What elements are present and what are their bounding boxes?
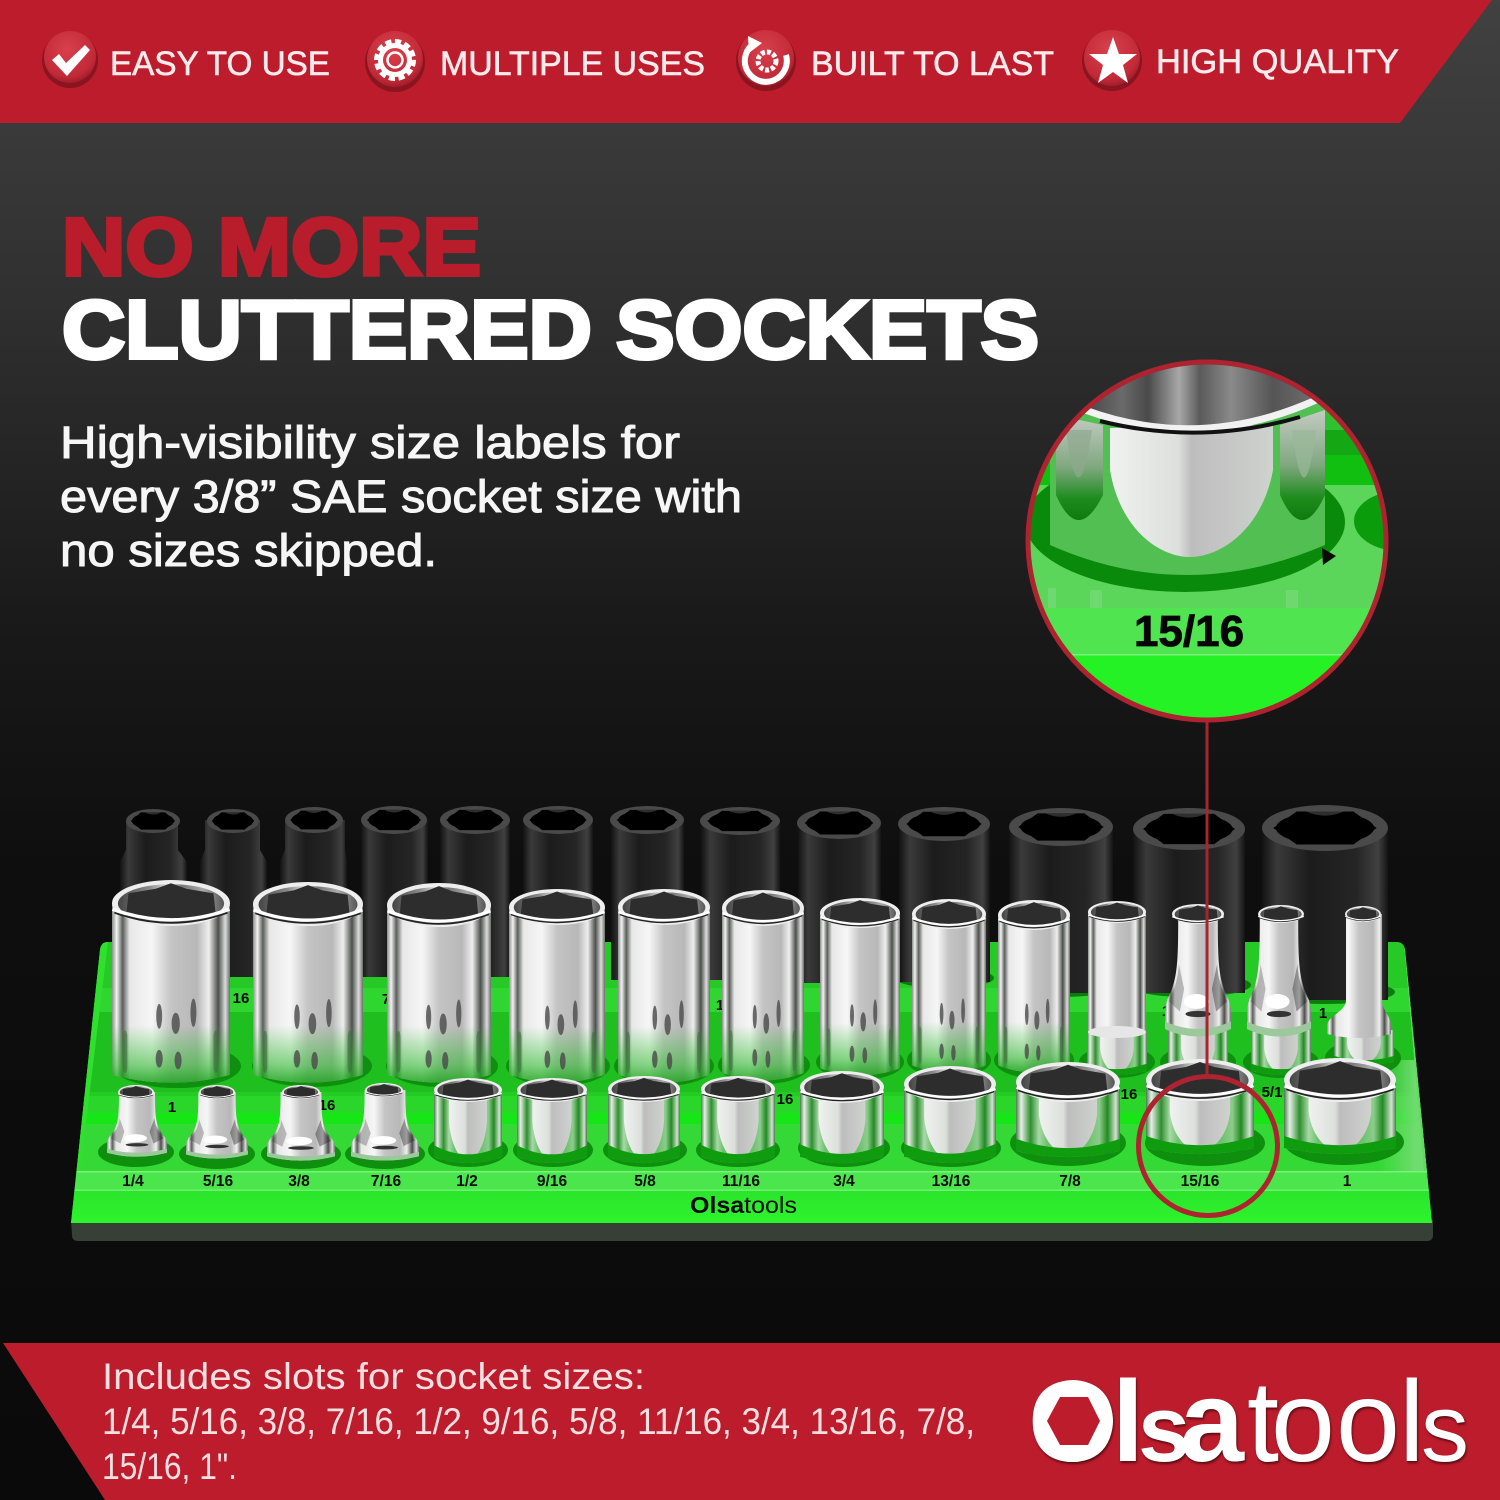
brand logo <box>1028 1358 1469 1486</box>
middle row size labels: 16 <box>1121 1086 1137 1103</box>
brand logo: s <box>1421 1375 1469 1482</box>
middle row chrome sockets <box>112 880 1401 1088</box>
front row size labels: 9/16 <box>537 1173 567 1190</box>
socket holes <box>98 1119 1404 1169</box>
tray surface in lens <box>1325 410 1344 430</box>
description text: High-visibility size labels for <box>60 417 680 468</box>
back row black sockets <box>120 805 1395 1004</box>
front row size labels: 3/8 <box>288 1173 310 1190</box>
hole shadows <box>894 968 1395 1004</box>
magnified callout <box>1026 360 1388 722</box>
back row size labels <box>233 990 1327 1022</box>
middle row size labels: 5/1 <box>1262 1084 1282 1101</box>
narrow chrome sockets <box>1087 901 1394 1075</box>
socket hole in lens <box>1030 484 1345 592</box>
back row size labels: 1 <box>1162 1003 1170 1020</box>
description text <box>60 417 742 576</box>
right chrome reflection <box>1280 410 1325 520</box>
brand logo: a <box>1180 1358 1245 1486</box>
socket interior in lens <box>1090 364 1311 426</box>
front row size labels: 7/16 <box>371 1173 401 1190</box>
top feature banner <box>0 0 1492 123</box>
description text: no sizes skipped. <box>60 525 437 576</box>
green tray <box>60 942 1450 1223</box>
front row size labels: 5/16 <box>203 1173 233 1190</box>
bottom banner <box>3 1343 1500 1500</box>
socket body in lens <box>1050 400 1325 575</box>
brand logo: O <box>1028 1358 1117 1486</box>
callout connector line <box>1206 720 1208 1078</box>
description text: every 3/8” SAE socket size with <box>60 471 742 522</box>
socket organizer product <box>60 805 1450 1241</box>
socket size list text: Includes slots for socket sizes: <box>102 1356 645 1397</box>
front row size labels: 11/16 <box>722 1173 760 1190</box>
dark base of tray <box>71 1220 1433 1241</box>
front row size labels: 13/16 <box>932 1173 971 1190</box>
brand logo: o <box>1336 1358 1400 1486</box>
front row size labels: 7/8 <box>1059 1173 1081 1190</box>
heading line: cluttered sockets: CLUTTERED SOCKETS <box>62 283 1039 376</box>
socket size list text: 15/16, 1". <box>102 1446 237 1487</box>
heading line: no more: NO MORE <box>62 202 481 293</box>
feature label: high quality: HIGH QUALITY <box>1156 43 1399 81</box>
feature label: easy to use: EASY TO USE <box>110 45 330 83</box>
feature label: built to last: BUILT TO LAST <box>811 45 1054 83</box>
label strip in lens <box>1044 608 1370 654</box>
front row size labels: 15/16 <box>1181 1173 1220 1190</box>
middle row size labels <box>168 1084 1282 1116</box>
icon: check mark badge <box>42 31 98 88</box>
callout ring on 15/16 slot <box>1138 1076 1278 1216</box>
central highlight <box>1110 425 1273 557</box>
front row size labels: 3/4 <box>833 1173 855 1190</box>
socket size list text: 1/4, 5/16, 3/8, 7/16, 1/2, 9/16, 5/8, 11/16, 3/4, 13/16, 7/8, <box>102 1401 975 1442</box>
front row size labels: 1/2 <box>456 1173 478 1190</box>
icon: gear badge <box>365 31 425 92</box>
brand logo: s <box>1138 1376 1190 1481</box>
back row size labels: 1 <box>716 997 724 1014</box>
icon: durability arrow badge <box>736 30 796 91</box>
front row size labels: 5/8 <box>634 1173 656 1190</box>
middle row size labels: 1 <box>168 1099 176 1116</box>
front row size labels <box>122 1173 1352 1190</box>
back row size labels: 1 <box>1319 1005 1327 1022</box>
brand logo: o <box>1271 1358 1335 1486</box>
back row size labels: 16 <box>233 990 249 1007</box>
front row chrome sockets <box>98 1058 1404 1169</box>
icon: star badge <box>1082 30 1142 91</box>
tray brand name: Olsatools <box>690 1192 797 1218</box>
left chrome reflection <box>1056 415 1103 520</box>
middle row size labels: 16 <box>777 1091 793 1108</box>
brand logo: l <box>1112 1358 1144 1486</box>
middle row size labels: 16 <box>319 1097 335 1114</box>
front row size labels: 1 <box>1343 1173 1352 1190</box>
heading <box>62 202 1039 376</box>
socket holes <box>113 1040 1401 1088</box>
front row size labels: 1/4 <box>122 1173 144 1190</box>
magnified size label: 15/16 <box>1134 607 1244 656</box>
socket size list text <box>102 1356 975 1487</box>
brand logo: t <box>1247 1358 1279 1486</box>
back row size labels: 7 <box>382 991 390 1008</box>
reflection streaks below socket <box>1048 588 1298 608</box>
feature label: multiple uses: MULTIPLE USES <box>440 45 705 83</box>
brand logo: l <box>1399 1358 1425 1486</box>
